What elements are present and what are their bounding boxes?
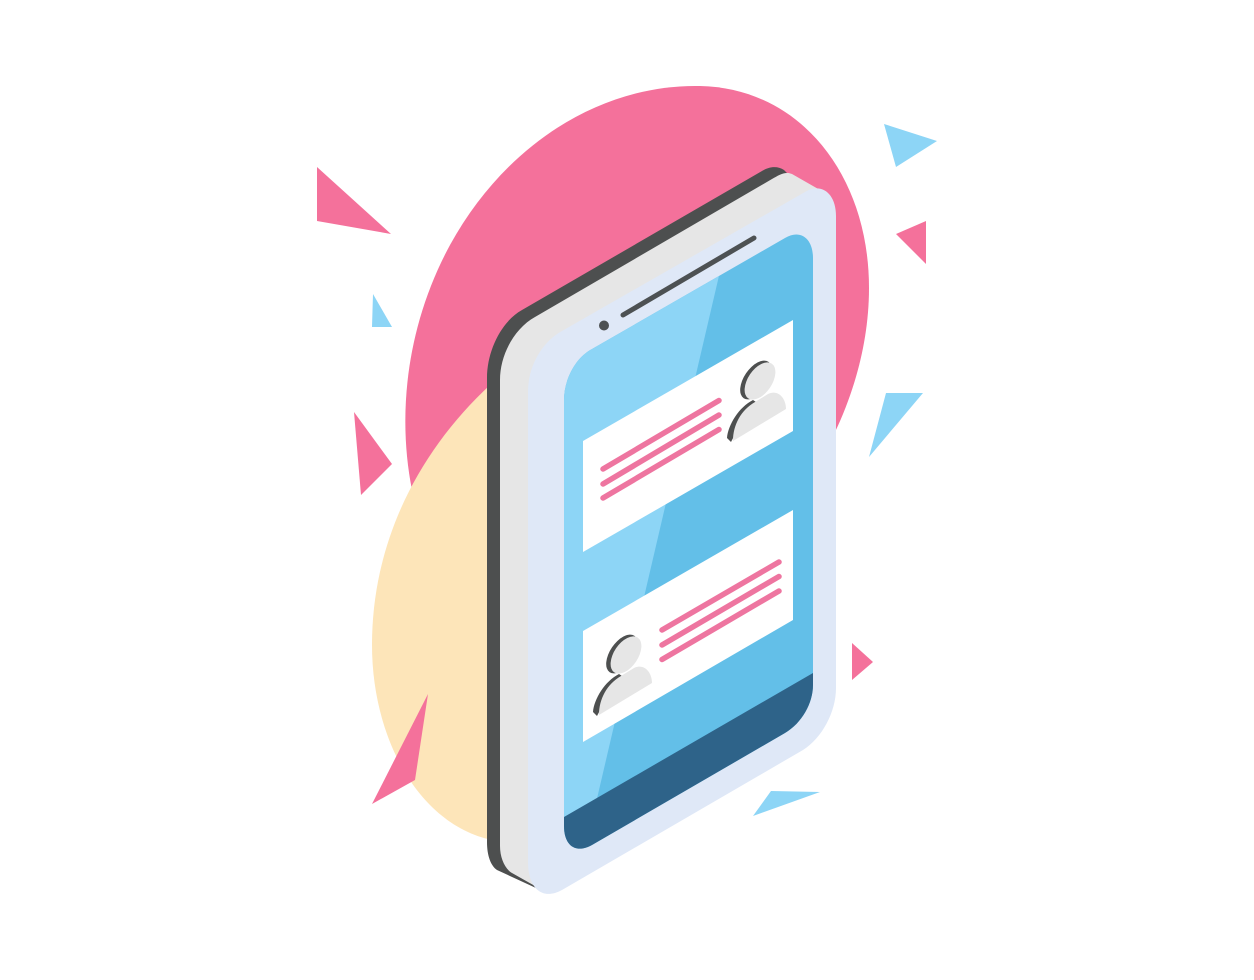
phone front bbox=[528, 188, 836, 894]
avatar bbox=[593, 629, 652, 716]
triangle: blue bottom right bbox=[753, 791, 820, 816]
camera bbox=[599, 320, 609, 330]
card: bottom message bbox=[583, 510, 793, 742]
triangle: pink left bbox=[354, 412, 392, 495]
card background bbox=[583, 320, 793, 552]
background blob: pink bbox=[405, 86, 869, 520]
triangle: pink lower left bbox=[372, 694, 428, 804]
phone back edge bbox=[487, 167, 790, 888]
message lines bbox=[603, 400, 719, 498]
background blob: cream bbox=[372, 385, 492, 840]
triangle: pink lower right bbox=[852, 643, 873, 680]
triangle: pink top left bbox=[317, 167, 391, 234]
home bar bbox=[564, 673, 813, 849]
message lines bbox=[662, 562, 779, 660]
speaker bbox=[623, 238, 754, 315]
card: top message bbox=[583, 320, 793, 552]
screen bbox=[560, 225, 820, 870]
phone side bbox=[500, 173, 820, 886]
avatar bbox=[727, 355, 786, 442]
triangle: blue right bbox=[869, 393, 923, 457]
triangle: pink upper right bbox=[896, 221, 926, 264]
screen reflection bbox=[564, 276, 719, 836]
screen base bbox=[560, 225, 820, 865]
illustration: isometric smartphone bbox=[317, 86, 937, 894]
triangle: blue top right bbox=[884, 124, 937, 167]
phone bbox=[487, 167, 836, 894]
card background bbox=[583, 510, 793, 742]
triangle: blue left bbox=[372, 294, 392, 327]
